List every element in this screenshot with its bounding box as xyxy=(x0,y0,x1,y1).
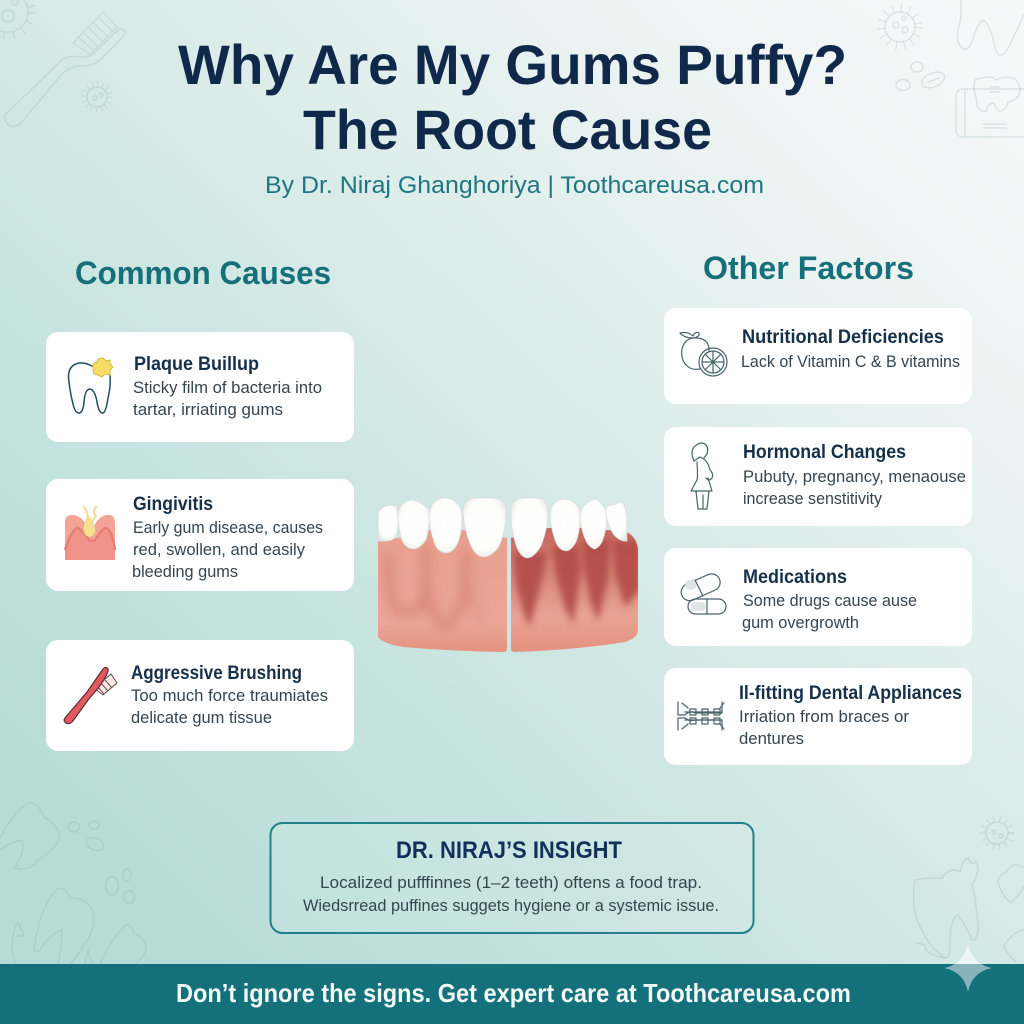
healthy gum xyxy=(376,525,509,655)
text: nutritional deficiencies: Nutritional Deficiencies xyxy=(742,327,944,348)
text: medications xyxy=(742,567,917,632)
text: medications: gum overgrowth xyxy=(742,614,859,632)
card: plaque buildup xyxy=(46,332,354,442)
text: nutritional deficiencies: Lack of Vitamin C & B vitamins xyxy=(741,353,960,371)
icon: red toothbrush xyxy=(64,668,117,724)
card: ill-fitting dental appliances xyxy=(664,668,972,765)
icon: inflamed gum xyxy=(65,507,115,560)
callout: Dr. Niraj's insight: Localized pufffinnes (1–2 teeth) oftens a food trap. xyxy=(320,874,702,892)
decorative germ and teeth, bottom right xyxy=(914,819,1024,962)
subtitle: By Dr. Niraj Ghanghoriya | Toothcareusa.com xyxy=(265,172,764,199)
title xyxy=(178,33,847,161)
callout: Dr. Niraj's insight: DR. NIRAJ’S INSIGHT xyxy=(396,837,622,864)
text: plaque buildup xyxy=(133,354,322,419)
title: Why Are My Gums Puffy? xyxy=(178,33,847,96)
footer band xyxy=(0,944,1024,1024)
text: plaque buildup: Plaque Buillup xyxy=(134,354,259,375)
text: plaque buildup: Sticky film of bacteria into xyxy=(133,379,322,397)
text: nutritional deficiencies xyxy=(741,327,960,371)
text: aggressive brushing: Too much force traumiates xyxy=(131,687,328,705)
icon: pregnant woman xyxy=(691,443,713,509)
text: hormonal changes: increase senstitivity xyxy=(743,490,883,508)
text: plaque buildup: tartar, irriating gums xyxy=(133,401,283,419)
callout: Dr. Niraj's insight: Wiedsrread puffines suggets hygiene or a systemic issue. xyxy=(303,897,719,915)
icon: citrus fruit xyxy=(680,332,727,376)
icon: tooth with plaque xyxy=(68,358,113,413)
text: ill-fitting dental appliances: Irriation from braces or xyxy=(739,708,910,726)
text: aggressive brushing: Aggressive Brushing xyxy=(131,663,302,684)
title: The Root Cause xyxy=(303,98,712,161)
card: gingivitis xyxy=(46,479,354,591)
decorative toothbrush outline, top left xyxy=(4,12,125,127)
card: hormonal changes xyxy=(664,427,972,526)
text: gingivitis: red, swollen, and easily xyxy=(133,541,306,559)
text: gingivitis: Gingivitis xyxy=(133,494,213,515)
text: ill-fitting dental appliances: dentures xyxy=(739,730,804,748)
text: gingivitis: Early gum disease, causes xyxy=(133,519,323,537)
heading: common causes: Common Causes xyxy=(75,255,331,291)
text: medications: Medications xyxy=(743,567,847,588)
text: aggressive brushing: delicate gum tissue xyxy=(131,709,272,727)
text: hormonal changes xyxy=(743,442,966,508)
card: aggressive brushing xyxy=(46,640,354,751)
text: hormonal changes: Pubuty, pregnancy, menaouse xyxy=(743,468,966,486)
text: ill-fitting dental appliances: Il-fitting Dental Appliances xyxy=(739,683,962,704)
text: hormonal changes: Hormonal Changes xyxy=(743,442,906,463)
card: nutritional deficiencies xyxy=(664,308,972,404)
text: gingivitis xyxy=(132,494,323,581)
card: medications xyxy=(664,548,972,646)
heading: other factors: Other Factors xyxy=(703,250,914,286)
decorative teeth and bubbles, bottom left xyxy=(0,803,146,964)
decorative germ, pills, tooth and chart, top right xyxy=(881,0,1024,137)
text: ill-fitting dental appliances xyxy=(739,683,962,748)
callout: Dr. Niraj's insight xyxy=(270,823,754,933)
illustration: healthy vs inflamed gums xyxy=(376,498,640,655)
inflamed gum xyxy=(509,525,640,655)
footer band: Don’t ignore the signs. Get expert care at Toothcareusa.com xyxy=(176,978,851,1008)
text: medications: Some drugs cause ause xyxy=(743,592,917,610)
icon: braces xyxy=(678,702,724,730)
text: gingivitis: bleeding gums xyxy=(132,563,238,581)
decorative germs, top left xyxy=(0,0,110,110)
teeth xyxy=(378,498,627,558)
text: aggressive brushing xyxy=(131,663,328,727)
icon: capsules xyxy=(678,571,726,614)
